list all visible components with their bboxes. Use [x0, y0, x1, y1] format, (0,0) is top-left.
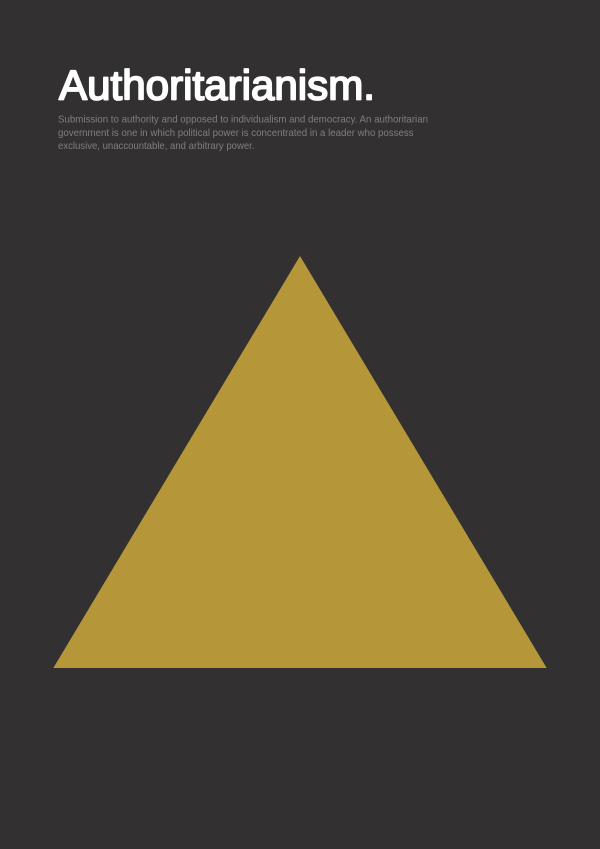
description text block: exclusive, unaccountable, and arbitrary power.	[58, 141, 254, 152]
description text block: government is one in which political power is concentrated in a leader who possess	[58, 128, 414, 139]
description text block	[58, 114, 428, 152]
title: Authoritarianism.	[59, 61, 375, 108]
gold triangle	[53, 256, 547, 668]
description text block: Submission to authority and opposed to individualism and democracy. An authoritarian	[58, 114, 428, 126]
